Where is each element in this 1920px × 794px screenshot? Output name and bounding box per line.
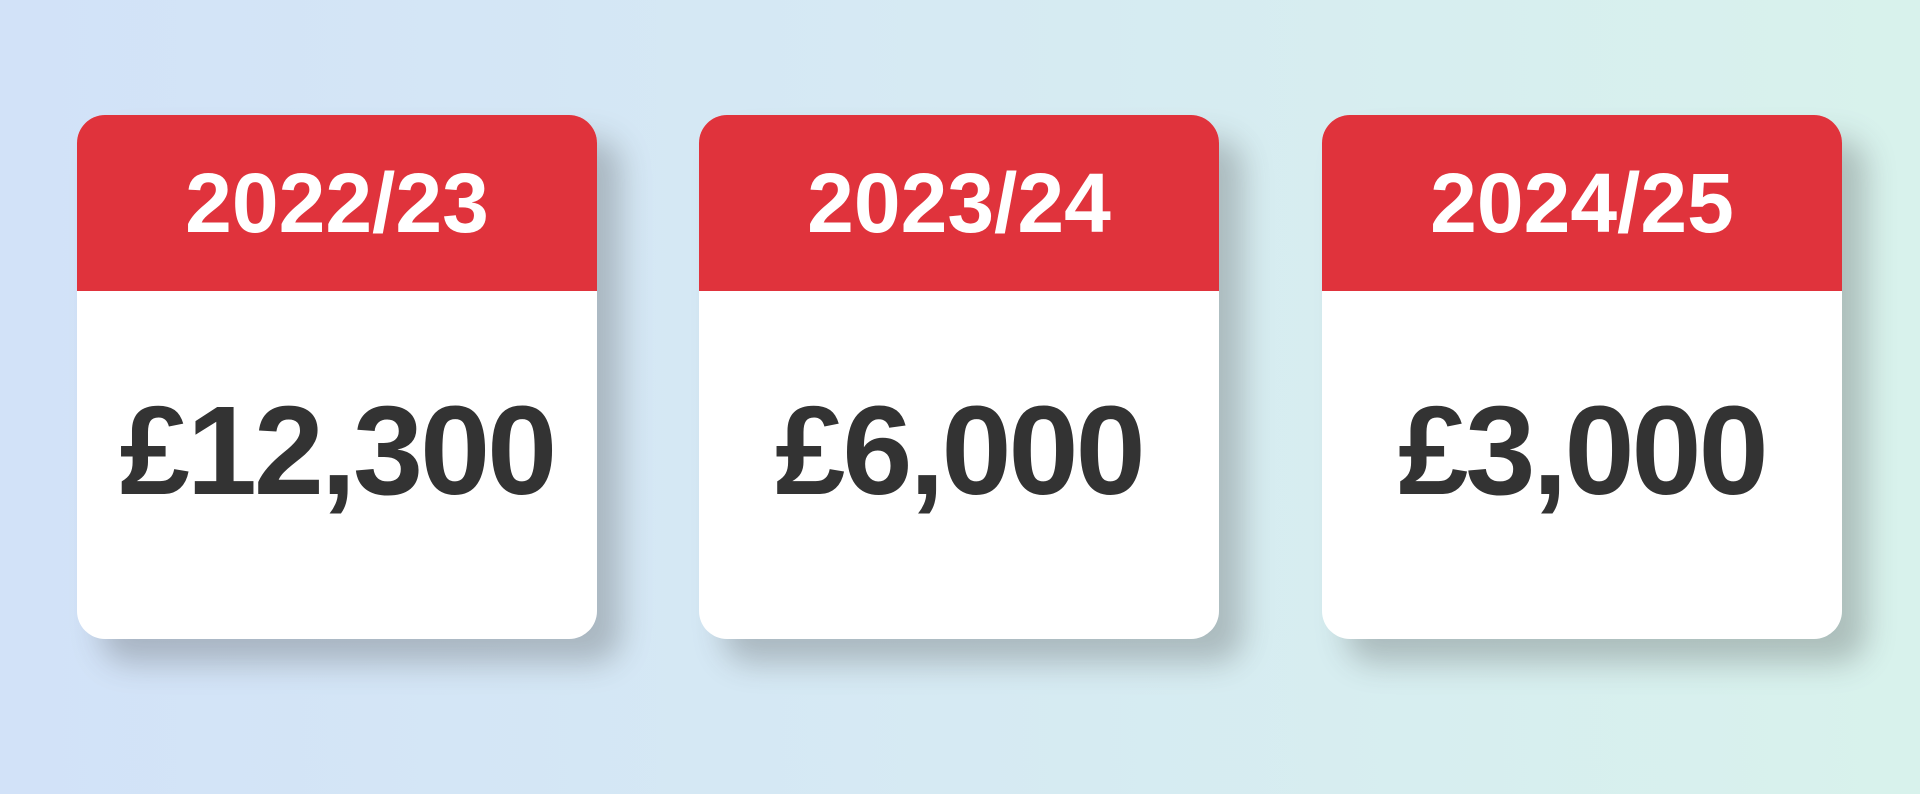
header: 2024/25: 2024/25 <box>1430 156 1734 250</box>
header: 2023/24: 2023/24 <box>807 156 1111 250</box>
card: 2023/24 <box>699 115 1219 639</box>
amount: £3,000: £3,000 <box>1398 380 1766 521</box>
header: 2023/24 <box>699 115 1219 291</box>
amount: £6,000: £6,000 <box>775 380 1143 521</box>
header: 2022/23 <box>77 115 597 291</box>
header: 2024/25 <box>1322 115 1842 291</box>
header: 2022/23: 2022/23 <box>185 156 489 250</box>
card: 2022/23 <box>77 115 597 639</box>
card: 2024/25 <box>1322 115 1842 639</box>
amount: £12,300: £12,300 <box>120 380 554 521</box>
